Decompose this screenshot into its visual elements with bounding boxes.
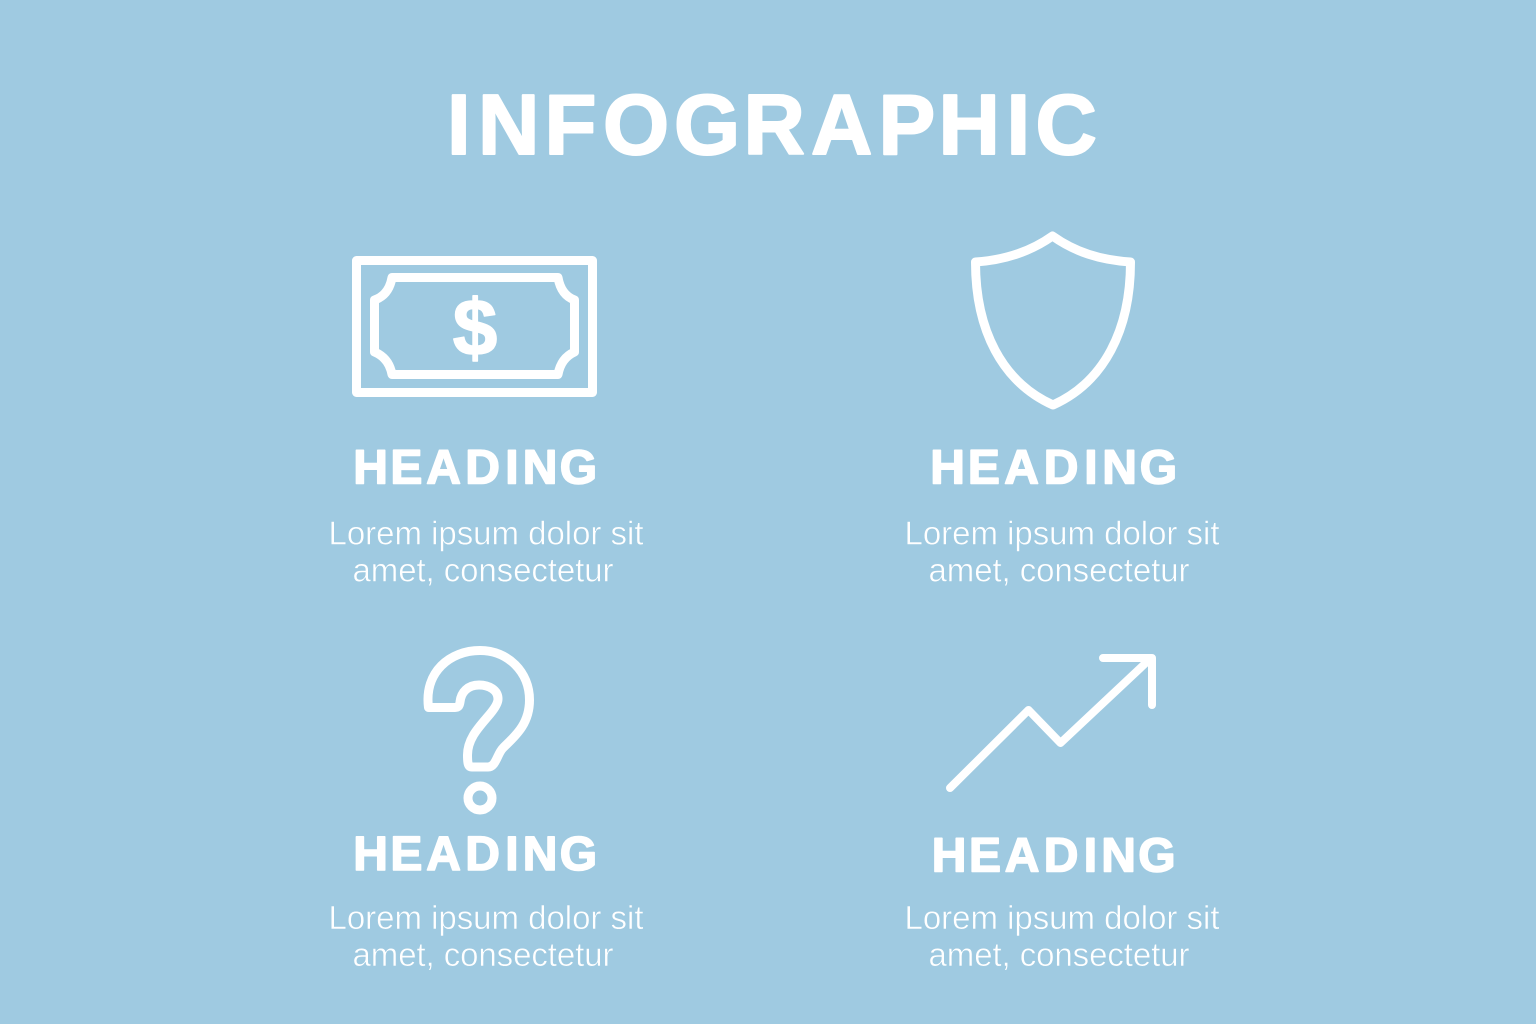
heading: HEADING: [353, 828, 597, 881]
icon: question mark: [428, 650, 530, 810]
heading: HEADING: [932, 830, 1176, 882]
panel: growth: [904, 658, 1220, 973]
panel: shield: [904, 236, 1220, 588]
heading: HEADING: [930, 442, 1177, 494]
icon: rising arrow: [950, 658, 1152, 788]
body text: Lorem ipsum dolor sit: [328, 514, 644, 552]
icon: banknote: $: [453, 283, 497, 372]
heading: HEADING: [353, 442, 597, 494]
panel: question: [328, 650, 644, 973]
body text: amet, consectetur: [352, 936, 614, 973]
body text: amet, consectetur: [928, 552, 1190, 588]
body text: Lorem ipsum dolor sit: [904, 899, 1220, 936]
body text: Lorem ipsum dolor sit: [904, 514, 1220, 552]
panel: money: [328, 260, 644, 588]
icon: shield: [976, 236, 1130, 405]
body text: Lorem ipsum dolor sit: [328, 899, 644, 936]
body text: amet, consectetur: [352, 552, 614, 588]
title: INFOGRAPHIC: [447, 78, 1097, 173]
body text: amet, consectetur: [928, 936, 1190, 973]
icon: banknote: [356, 260, 592, 392]
